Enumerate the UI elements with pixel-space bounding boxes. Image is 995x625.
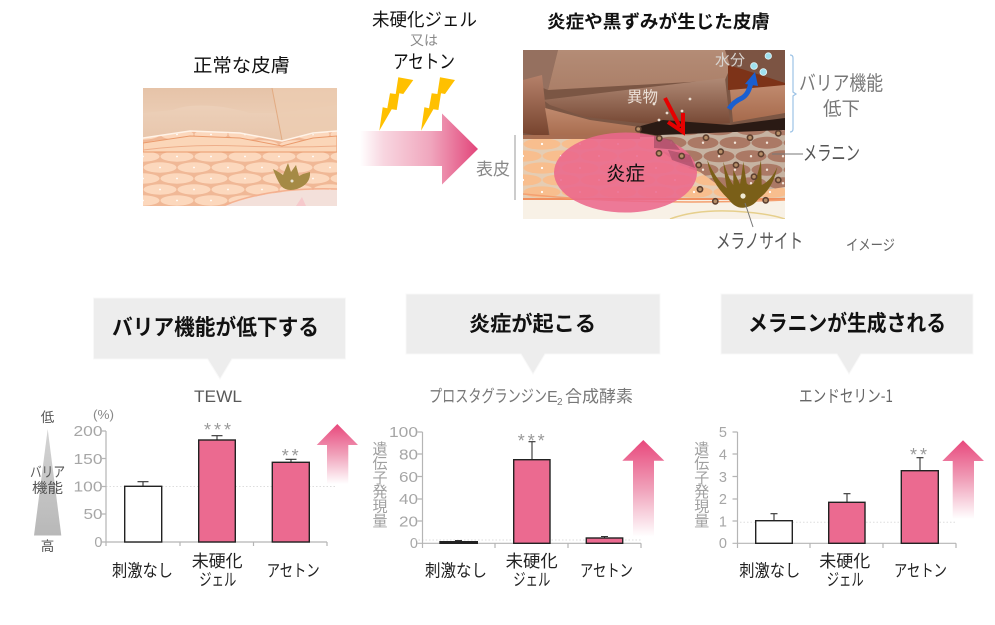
- arrow: TEWL increase: [317, 424, 358, 484]
- bar chart: endothelin-1: 現: [694, 496, 709, 516]
- chart title: PGE2 synthase: 2: [557, 397, 563, 408]
- bar chart: TEWL: 200: [74, 424, 102, 440]
- bar chart: PGE2 synthase: 未硬化: [506, 547, 558, 572]
- illustration: normal skin: [143, 88, 337, 206]
- scale: barrier function pyramid: 機能: [32, 478, 63, 498]
- bar chart: endothelin-1: 5: [719, 425, 727, 441]
- label: melanocyte: メラノサイト: [716, 225, 803, 254]
- icon: lightning bolt 1: [379, 77, 413, 131]
- callout: melanin produced: [721, 294, 973, 374]
- bar chart: endothelin-1: 伝: [694, 452, 709, 474]
- bar chart: PGE2 synthase: 子: [372, 467, 388, 488]
- bar chart: endothelin-1: 0: [719, 536, 727, 552]
- label: melanin: メラニン: [803, 137, 860, 166]
- label: epidermis: 表皮: [476, 155, 510, 180]
- label: melanocyte: [716, 203, 803, 254]
- chart title: PGE2 synthase: プロスタグランジン: [429, 382, 547, 407]
- bar chart: endothelin-1: 子: [694, 467, 709, 488]
- bar chart: TEWL: ***: [204, 420, 231, 440]
- bar chart: TEWL: アセトン: [267, 556, 320, 582]
- bar chart: TEWL: 刺激なし: [112, 556, 173, 582]
- callout: melanin produced: メラニンが生成される: [748, 306, 946, 338]
- callout: barrier decline: [94, 298, 346, 379]
- bar chart: PGE2 synthase: 40: [399, 492, 418, 508]
- bar chart: PGE2 synthase: 現: [372, 496, 388, 516]
- chart title: PGE2 synthase: 合成酵素: [565, 383, 633, 407]
- bar chart: PGE2 synthase: 遺: [372, 438, 388, 459]
- bar chart: PGE2 synthase: 伝: [372, 452, 388, 474]
- bar chart: TEWL: 未硬化: [192, 547, 243, 572]
- label: inflammation: 炎症: [606, 157, 645, 186]
- bar chart: endothelin-1: 2: [719, 492, 727, 508]
- illustration: inflamed skin: [523, 50, 785, 219]
- bar chart: TEWL: 150: [74, 452, 102, 468]
- bar chart: PGE2 synthase: 発: [372, 481, 388, 502]
- foreign particles: [653, 98, 691, 121]
- heading: normal skin: 正常な皮膚: [193, 52, 290, 78]
- red arrow: [665, 98, 683, 132]
- scale: barrier function pyramid: 高: [41, 535, 54, 555]
- callout: barrier decline: バリア機能が低下する: [112, 310, 319, 342]
- bar chart: PGE2 synthase: 20: [399, 514, 418, 530]
- bar chart: PGE2 synthase: アセトン: [580, 556, 633, 582]
- bar chart: TEWL: 50: [84, 507, 102, 523]
- label: melanin: [772, 137, 860, 166]
- bar chart: PGE2 synthase: [372, 425, 641, 590]
- label: acetone: アセトン: [393, 47, 455, 74]
- bar chart: PGE2 synthase: 60: [399, 470, 418, 486]
- heading: inflamed skin: 炎症や黒ずみが生じた皮膚: [547, 8, 770, 34]
- melanin granules: [636, 126, 781, 204]
- bar chart: endothelin-1: 刺激なし: [739, 556, 800, 582]
- bar chart: PGE2 synthase: 刺激なし: [425, 556, 487, 582]
- bar chart: endothelin-1: 3: [719, 470, 727, 486]
- bar chart: TEWL: 100: [74, 480, 102, 496]
- scale: barrier function pyramid: [30, 406, 65, 555]
- bar chart: endothelin-1: [694, 425, 956, 590]
- bar chart: PGE2 synthase: ジェル: [513, 566, 550, 590]
- scale: barrier function pyramid: バリア: [30, 462, 65, 482]
- bar chart: TEWL: [74, 407, 335, 590]
- bar chart: PGE2 synthase: 80: [399, 448, 418, 464]
- bar chart: endothelin-1: 1: [719, 514, 727, 530]
- bar chart: PGE2 synthase: ***: [518, 431, 545, 451]
- label: barrier function decline: [799, 67, 883, 121]
- chart title: PGE2 synthase: E: [547, 389, 558, 406]
- chart title: endothelin-1: エンドセリン-1: [799, 382, 893, 407]
- arrow: endothelin-1 increase: [942, 440, 984, 519]
- bar chart: TEWL: ジェル: [199, 566, 236, 590]
- bar chart: endothelin-1: 遺: [694, 438, 709, 459]
- label: or: 又は: [410, 29, 438, 49]
- melanocyte: [707, 160, 777, 208]
- scale: barrier function pyramid: 低: [41, 406, 55, 426]
- icon: lightning bolt 2: [421, 77, 455, 131]
- bar chart: PGE2 synthase: 0: [410, 536, 418, 552]
- bar chart: TEWL: **: [282, 446, 299, 466]
- bar chart: TEWL: (%): [93, 407, 114, 422]
- bar chart: endothelin-1: 4: [719, 448, 727, 464]
- label: foreign matter: 異物: [627, 85, 658, 107]
- blue arrow: [729, 72, 758, 109]
- bar chart: TEWL: 0: [94, 535, 102, 551]
- bar chart: PGE2 synthase: 100: [389, 425, 418, 441]
- label: image note: イメージ: [846, 234, 895, 255]
- bar chart: endothelin-1: アセトン: [894, 556, 947, 582]
- arrow: PGE2 synthase increase: [622, 440, 664, 537]
- inflammation ellipse: [554, 132, 697, 212]
- bar chart: endothelin-1: 量: [694, 510, 709, 531]
- arrow: main transition: [360, 114, 478, 184]
- bar chart: endothelin-1: 未硬化: [819, 547, 870, 572]
- chart title: TEWL: TEWL: [194, 387, 242, 406]
- label: barrier function decline: 低下: [823, 94, 860, 121]
- label: water: 水分: [715, 49, 745, 70]
- bar chart: endothelin-1: **: [910, 445, 927, 465]
- label: barrier function decline: バリア機能: [799, 67, 883, 96]
- bar chart: endothelin-1: 発: [694, 481, 709, 502]
- callout: inflammation occurs: 炎症が起こる: [469, 308, 596, 338]
- icon: melanocyte small: [273, 163, 310, 190]
- label: uncured gel: 未硬化ジェル: [372, 6, 477, 32]
- bar chart: endothelin-1: ジェル: [827, 566, 864, 590]
- bar chart: PGE2 synthase: 量: [372, 510, 388, 531]
- water droplets: [751, 53, 772, 75]
- callout: inflammation occurs: [406, 294, 660, 374]
- bracket: barrier: [790, 55, 796, 132]
